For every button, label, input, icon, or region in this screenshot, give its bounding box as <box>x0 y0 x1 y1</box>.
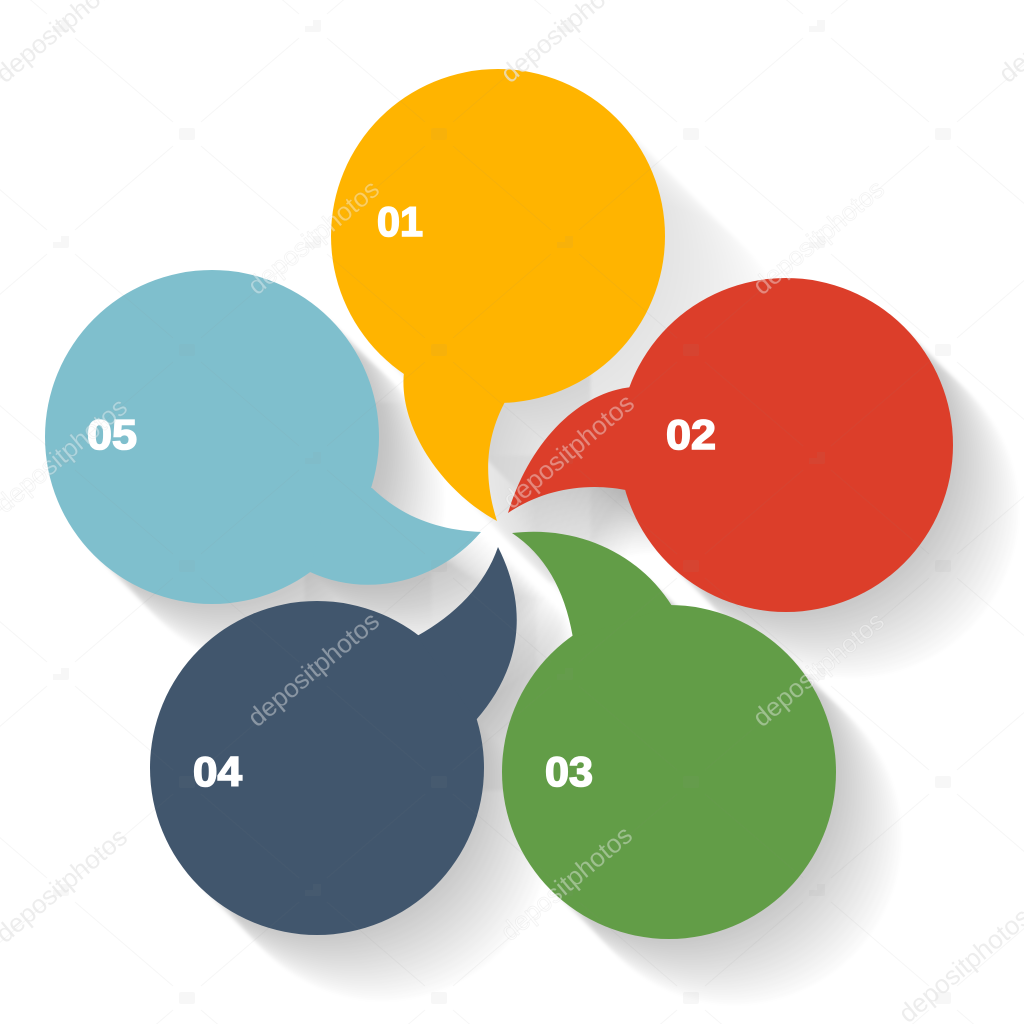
label 05: 05 <box>87 411 137 458</box>
watermarks: depositphotos <box>497 388 640 515</box>
watermarks: depositphotos <box>747 174 890 301</box>
bubble 03: green <box>502 532 836 939</box>
watermarks: depositphotos <box>242 606 385 733</box>
label 02: 02 <box>666 411 716 458</box>
bubble 05: light blue <box>45 270 481 604</box>
bubble 02: red <box>508 278 953 612</box>
label 04: 04 <box>193 748 243 795</box>
watermarks: depositphotos <box>242 174 385 301</box>
bubble 04: navy <box>150 547 517 935</box>
label 01: 01 <box>377 198 423 245</box>
label 03: 03 <box>545 748 593 795</box>
watermarks: depositphotos <box>747 606 890 733</box>
bubble 01: yellow <box>331 69 665 521</box>
watermarks: depositphotos <box>495 820 638 947</box>
